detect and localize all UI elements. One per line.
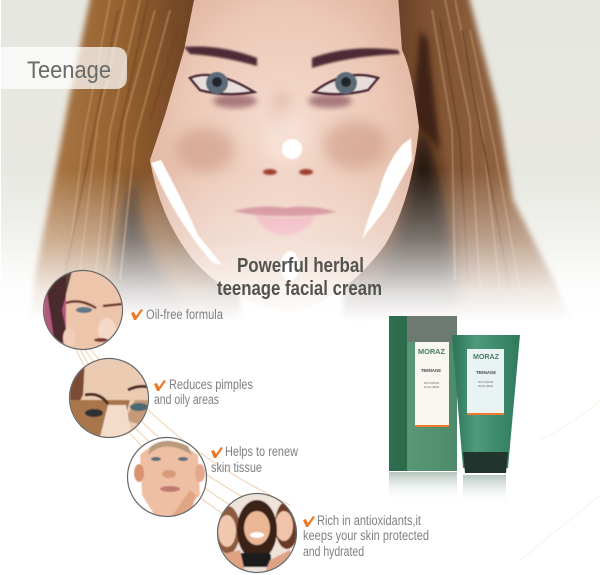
benefit: renew skin [211,444,298,475]
headline: teenage facial cream [217,278,382,300]
product: box and tube [389,316,520,505]
circle photo: friends [216,494,299,572]
product box: POLYGONUM [424,381,439,385]
product tube: MORAZ [473,354,500,361]
bottom fade of the photo [0,170,600,352]
benefit: reduces pimples: and oily areas [154,392,219,407]
benefit: renew skin: Helps to renew [225,444,298,459]
product box: MORAZ [418,349,446,356]
icon: check mark [303,516,315,527]
circle photo: oil-free [44,270,122,350]
teenage label: Teenage [27,57,111,84]
portrait photo [28,0,580,345]
teenage label [1,47,127,89]
benefit: antioxidants: keeps your skin protected [303,528,429,543]
product box [389,316,457,471]
background [1,0,600,330]
benefit: oil-free formula: Oil-free formula [146,307,223,322]
hair [28,0,580,345]
product tube: POLYGONUM [478,380,493,384]
product tube: FACIAL CREAM [478,384,493,388]
circle photo: reduces pimples [70,358,148,438]
benefit: antioxidants [303,513,429,559]
circle photo: renew skin [128,438,206,516]
benefit: renew skin: skin tissue [211,460,262,475]
benefit: antioxidants: and hydrated [303,544,364,559]
reflection [389,472,506,505]
eyes [190,72,378,108]
icon: check mark [211,447,223,458]
face [150,0,419,312]
benefit: reduces pimples: Reduces pimples [169,377,253,392]
benefit: antioxidants: Rich in antioxidants,it [317,513,421,528]
benefit: reduces pimples [154,377,253,407]
icon: check mark [154,380,166,391]
product tube: TEENAGE [476,370,496,375]
icon: check mark [131,309,143,320]
nose [263,105,313,175]
headline: Powerful herbal [237,255,364,277]
headline [217,255,382,300]
lips [233,207,337,235]
cream dabs [151,138,412,281]
freckled cheeks [175,92,387,172]
connecting swirl lines [74,345,600,560]
product box: TEENAGE [421,368,441,373]
product box: FACIAL CREAM [424,385,439,389]
eyebrows [184,46,400,68]
product tube [452,335,520,473]
